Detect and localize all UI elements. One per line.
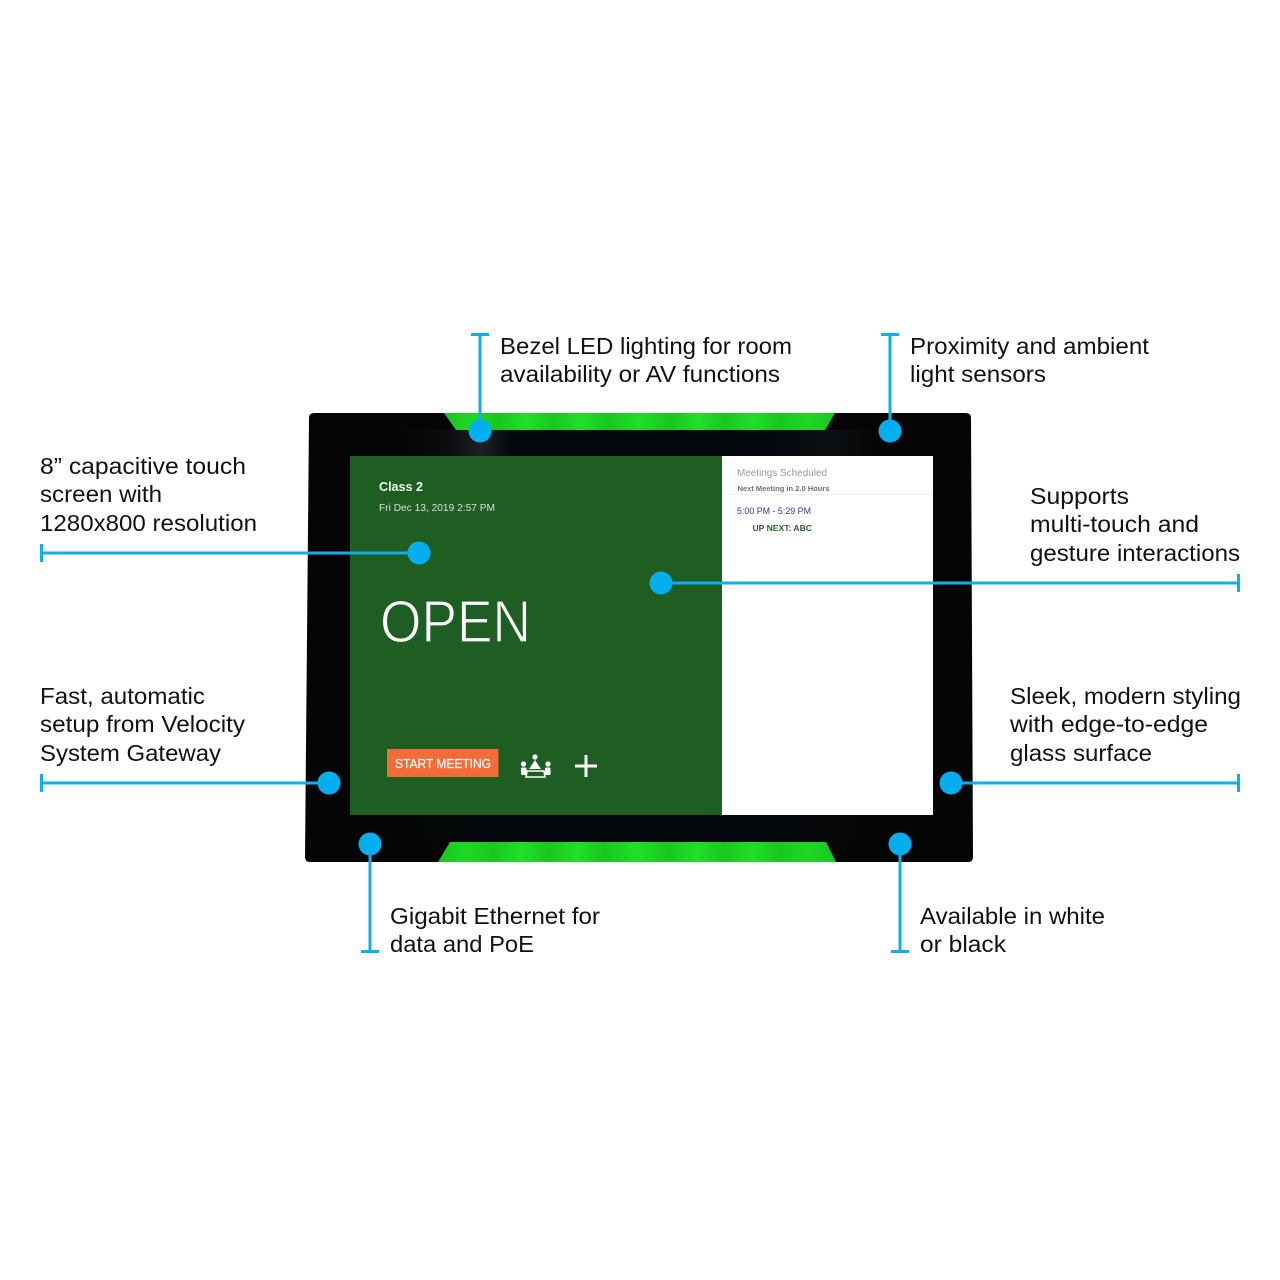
- callout: gigabit ethernet: data and PoE: [390, 931, 534, 957]
- date and time: Fri Dec 13, 2019 2:57 PM: [379, 502, 495, 514]
- callout: multi-touch: gesture interactions: [1030, 540, 1240, 566]
- schedule heading: Meetings Scheduled: [737, 468, 827, 479]
- callout: proximity sensors: Proximity and ambient: [910, 333, 1150, 359]
- bezel bottom sheen: [400, 816, 880, 842]
- callout: sleek styling: glass surface: [1010, 740, 1152, 766]
- callout: color options: Available in white: [920, 903, 1105, 929]
- screen: green status panel: [350, 456, 723, 815]
- device: touch panel: [305, 413, 973, 862]
- callout: proximity sensors: [878, 333, 1150, 442]
- screen: white schedule panel: [722, 456, 933, 815]
- status: OPEN: OPEN: [380, 589, 531, 655]
- callout: automatic setup: [40, 683, 340, 794]
- start meeting button: START MEETING: [395, 757, 491, 771]
- icon: meeting people: [521, 754, 551, 777]
- callout: sleek styling: with edge-to-edge: [1009, 711, 1208, 737]
- next meeting note: Next Meeting in 2.0 Hours: [738, 484, 830, 493]
- bottom LED light bar: [438, 842, 836, 862]
- start meeting button: [387, 749, 498, 777]
- callout: gigabit ethernet: Gigabit Ethernet for: [390, 903, 600, 929]
- callout: capacitive touch screen: [40, 453, 430, 564]
- callout: sleek styling: Sleek, modern styling: [1010, 683, 1241, 709]
- bezel: [305, 413, 973, 862]
- up next: UP NEXT: ABC: [752, 523, 812, 533]
- callout: capacitive touch screen: 1280x800 resolution: [40, 510, 257, 536]
- callout: color options: [888, 832, 1105, 957]
- callout: automatic setup: System Gateway: [40, 740, 222, 766]
- callout: automatic setup: Fast, automatic: [40, 683, 205, 709]
- callout: sleek styling: [940, 683, 1241, 794]
- room name: Class 2: [379, 480, 423, 494]
- callout: bezel LED lighting: Bezel LED lighting for room: [500, 333, 792, 359]
- callout: bezel LED lighting: [468, 333, 792, 442]
- callout: capacitive touch screen: 8” capacitive touch: [40, 453, 246, 479]
- callout: automatic setup: setup from Velocity: [40, 711, 246, 737]
- bezel top sheen: [400, 430, 880, 456]
- callout: gigabit ethernet: [358, 832, 600, 957]
- callout: bezel LED lighting: availability or AV functions: [500, 361, 780, 387]
- callout: proximity sensors: light sensors: [910, 361, 1046, 387]
- top LED light bar: [444, 413, 835, 430]
- callout: multi-touch: Supports: [1030, 483, 1129, 509]
- callout: capacitive touch screen: screen with: [40, 481, 162, 507]
- meeting time: 5:00 PM - 5:29 PM: [737, 506, 811, 516]
- callout: color options: or black: [920, 931, 1007, 957]
- callout: multi-touch: multi-touch and: [1030, 511, 1199, 537]
- callout: multi-touch: [650, 483, 1240, 594]
- icon: plus: [575, 755, 597, 777]
